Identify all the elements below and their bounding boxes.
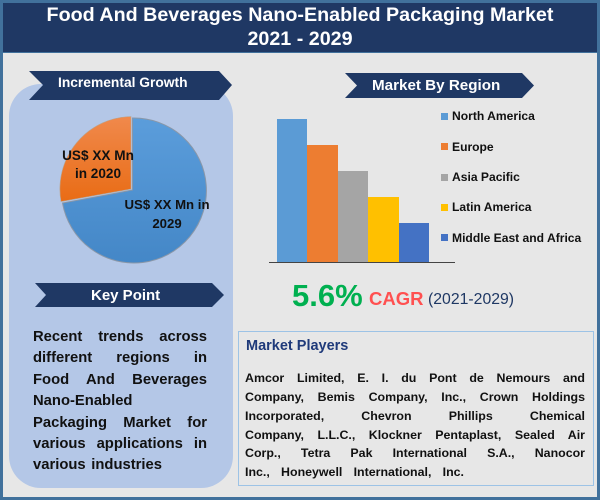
ribbon: Incremental Growth: Incremental Growth xyxy=(58,75,188,90)
ribbon: Market By Region: Market By Region xyxy=(372,77,500,94)
key point text: various industries xyxy=(33,457,162,473)
pie label: 2020 xyxy=(62,148,134,180)
pie slice: 2029 xyxy=(62,118,206,263)
CAGR callout xyxy=(292,278,514,313)
market players text: Incorporated, Chevron Phillips Chemical xyxy=(245,409,585,423)
title banner xyxy=(3,3,597,53)
legend: Asia Pacific xyxy=(452,170,520,184)
ribbon: Key Point xyxy=(35,283,225,307)
key point text: Food And Beverages xyxy=(33,372,207,388)
pie label: 2020: in 2020 xyxy=(75,166,121,180)
CAGR callout: 5.6% xyxy=(292,278,363,313)
market players text xyxy=(245,371,585,479)
market players text: Company, L.L.C., Klockner Pentaplast, Sealed Air xyxy=(245,428,585,442)
legend: Latin America xyxy=(452,200,532,214)
key point text: various applications in xyxy=(33,436,207,452)
title banner: 2021 - 2029 xyxy=(247,28,353,50)
title banner: Food And Beverages Nano-Enabled Packaging Market xyxy=(47,4,553,26)
panel: market players xyxy=(238,331,594,486)
CAGR callout: (2021-2029) xyxy=(428,291,514,308)
pie chart xyxy=(60,116,207,264)
pie label: 2020: US$ XX Mn xyxy=(62,148,134,163)
key point text: Recent trends across xyxy=(33,329,207,345)
market players text: Amcor Limited, E. I. du Pont de Nemours and xyxy=(245,371,585,385)
pie label: 2029 xyxy=(124,197,210,231)
pie slice: 2020 xyxy=(60,116,131,202)
key point text: Nano-Enabled xyxy=(33,393,132,409)
pie label: 2029: US$ XX Mn in xyxy=(124,197,210,212)
legend: North America xyxy=(452,109,535,123)
ribbon: Market By Region xyxy=(345,73,534,98)
bar chart xyxy=(269,119,455,263)
key point text: different regions in xyxy=(33,350,207,366)
pie label: 2029: 2029 xyxy=(152,216,182,231)
market players heading: Market Players xyxy=(246,338,348,354)
legend: Europe xyxy=(452,140,494,154)
panel: incremental growth and key point xyxy=(9,84,233,488)
key point text xyxy=(33,329,207,473)
legend xyxy=(441,109,582,245)
legend: Middle East and Africa xyxy=(452,231,581,245)
ribbon: Key Point: Key Point xyxy=(91,287,160,304)
market players text: Inc., Honeywell International, Inc. xyxy=(245,465,464,479)
market players text: Company, Bemis Company, Inc., Crown Holdings xyxy=(245,390,585,404)
key point text: Packaging Market for xyxy=(33,415,207,431)
CAGR callout: CAGR xyxy=(369,288,423,309)
ribbon: Incremental Growth xyxy=(29,71,233,101)
market players text: Corp., Tetra Pak International S.A., Nanocor xyxy=(245,446,585,460)
